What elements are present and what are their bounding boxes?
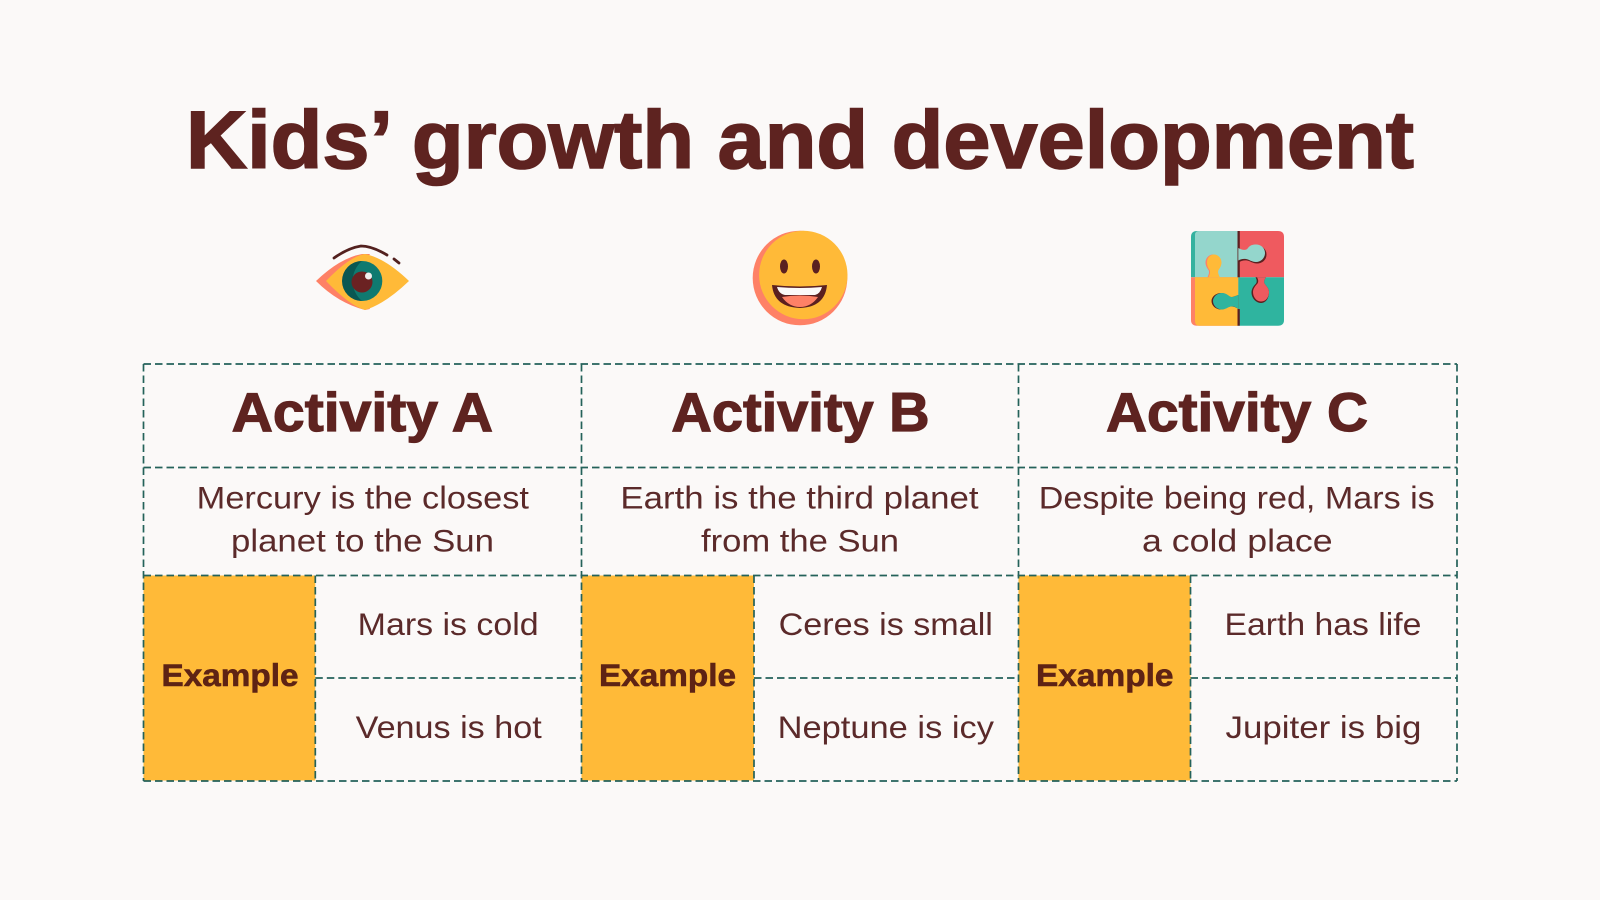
text: Activity B description <box>620 480 979 559</box>
text: Ceres is small: Ceres is small <box>779 606 993 642</box>
text: Venus is hot: Venus is hot <box>356 709 542 745</box>
text: Activity A description: planet to the Sun <box>231 523 494 559</box>
table grid <box>144 364 1457 781</box>
label: Example A: Example <box>162 657 298 693</box>
text: Mars is cold: Mars is cold <box>358 606 539 642</box>
text: Activity A description: Mercury is the closest <box>197 480 529 516</box>
icon: puzzle <box>1191 231 1284 326</box>
example cell A <box>144 576 315 780</box>
example cell B <box>582 576 754 780</box>
heading: Activity B: Activity B <box>671 381 930 443</box>
text: Neptune is icy: Neptune is icy <box>778 709 994 745</box>
text: Activity C description: a cold place <box>1142 523 1333 559</box>
text: Activity A description <box>197 480 529 559</box>
label: Example C: Example <box>1036 657 1174 693</box>
text: Jupiter is big: Jupiter is big <box>1226 709 1421 745</box>
label: Example B: Example <box>599 657 736 693</box>
heading: Activity A: Activity A <box>232 381 493 443</box>
text: Activity B description: from the Sun <box>701 523 899 559</box>
text: Activity C description <box>1039 480 1435 559</box>
text: Activity B description: Earth is the third planet <box>620 480 979 516</box>
text: Activity C description: Despite being red, Mars is <box>1039 480 1435 516</box>
example cell C <box>1018 576 1190 780</box>
title: Kids’ growth and development <box>186 95 1414 186</box>
heading: Activity C: Activity C <box>1106 381 1368 443</box>
text: Earth has life: Earth has life <box>1224 606 1421 642</box>
icon: smiling face <box>753 231 848 325</box>
icon: eye <box>316 246 409 310</box>
